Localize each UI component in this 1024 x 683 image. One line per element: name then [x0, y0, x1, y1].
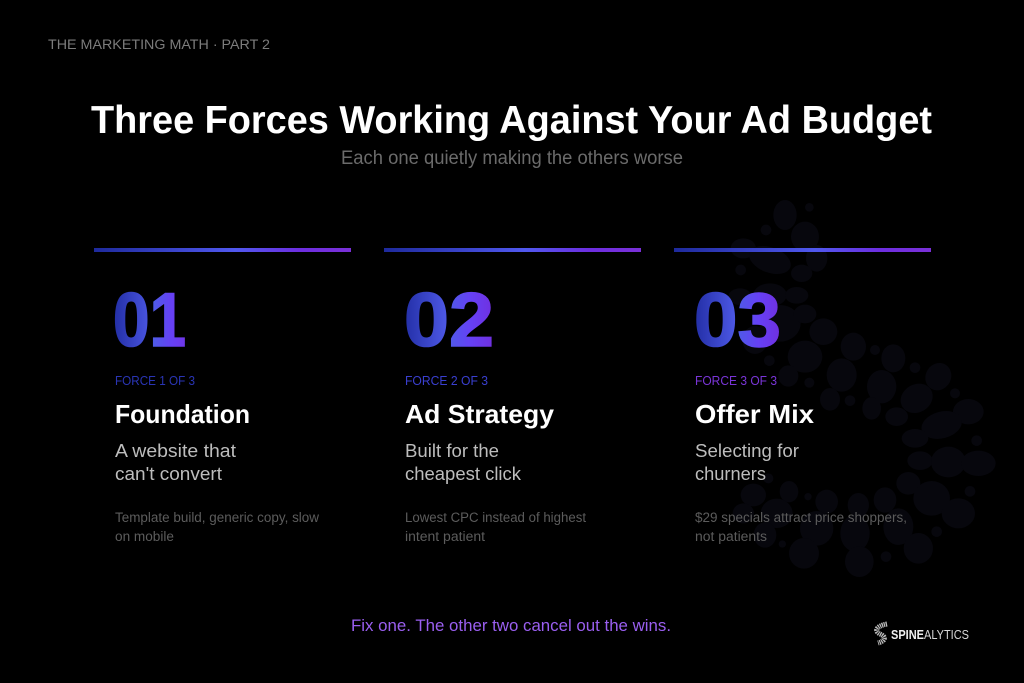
detail foundation: Template build, generic copy, slow	[115, 510, 319, 525]
panel: force 2 ad strategy	[384, 248, 641, 544]
number 01: 01	[113, 278, 186, 363]
accent bar 2	[384, 248, 641, 252]
detail foundation: on mobile	[115, 529, 174, 544]
detail ad strategy: intent patient	[405, 529, 485, 544]
detail offer mix: $29 specials attract price shoppers,	[695, 510, 907, 525]
panel: force 1 foundation	[94, 248, 351, 544]
number 02: 02	[404, 278, 494, 363]
accent bar 3	[674, 248, 931, 252]
wordmark: SPINEALYTICS	[891, 627, 969, 642]
heading ad strategy: Ad Strategy	[405, 399, 555, 429]
description offer mix: churners	[695, 464, 766, 484]
icon: spine	[877, 624, 887, 643]
description ad strategy: Built for the	[405, 441, 499, 461]
description offer mix: Selecting for	[695, 441, 799, 461]
number 03: 03	[694, 278, 781, 363]
detail ad strategy: Lowest CPC instead of highest	[405, 510, 586, 525]
label force 1: FORCE 1 OF 3	[115, 374, 195, 388]
panel: force 3 offer mix	[674, 248, 931, 544]
heading offer mix: Offer Mix	[695, 399, 815, 429]
description foundation: can't convert	[115, 464, 222, 484]
title: Three Forces Working Against Your Ad Budget	[91, 99, 932, 142]
label force 2: FORCE 2 OF 3	[405, 374, 488, 388]
heading foundation: Foundation	[115, 399, 250, 429]
decorative spine watermark	[728, 200, 996, 577]
description foundation: A website that	[115, 441, 236, 461]
description ad strategy: cheapest click	[405, 464, 522, 484]
detail offer mix: not patients	[695, 529, 767, 544]
eyebrow label: THE MARKETING MATH · PART 2	[48, 37, 270, 52]
closing callout: Fix one. The other two cancel out the wins.	[351, 616, 671, 635]
label force 3: FORCE 3 OF 3	[695, 374, 777, 388]
subtitle: Each one quietly making the others worse	[341, 148, 683, 169]
accent bar 1	[94, 248, 351, 252]
logo: spinealytics	[877, 624, 969, 643]
